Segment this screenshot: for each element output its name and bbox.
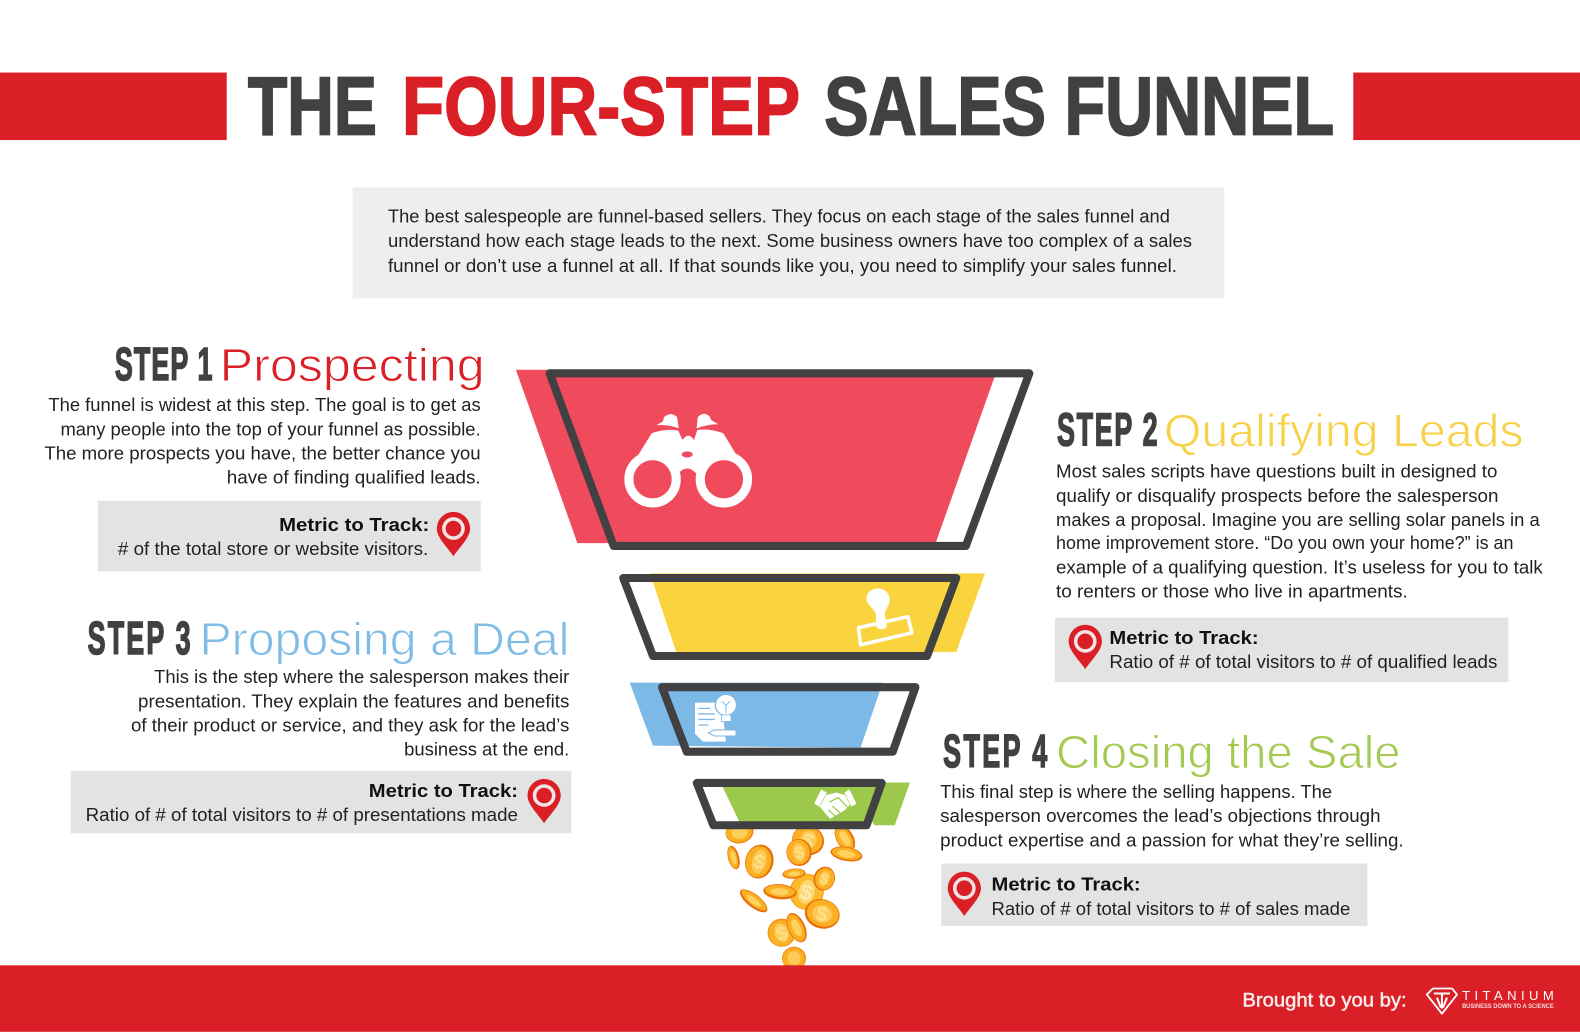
step 2 metric: Metric to Track:	[1109, 627, 1259, 648]
falling coins: $	[793, 842, 806, 863]
step 4 metric: Ratio of # of total visitors to # of sales made	[992, 899, 1350, 919]
step 3 panel	[71, 613, 571, 833]
intro text panel	[353, 187, 1224, 298]
step 3 panel: Proposing a Deal	[200, 613, 569, 665]
funnel tier 1: red	[516, 370, 1029, 546]
step 1 metric: Metric to Track:	[279, 514, 429, 535]
step 4 panel	[940, 726, 1404, 926]
icon: stamp	[859, 588, 912, 645]
step 1 panel: The funnel is widest at this step. The goal is to get as	[48, 395, 481, 415]
step 2 metric: Ratio of # of total visitors to # of qualified leads	[1109, 652, 1497, 672]
icon: binoculars	[624, 414, 750, 503]
icon: handshake	[814, 789, 857, 819]
step 1 panel: STEP 1	[115, 340, 212, 391]
step 3 metric: Ratio of # of total visitors to # of presentations made	[86, 805, 518, 825]
step 2 panel: example of a qualifying question. It’s useless for you to talk	[1056, 557, 1544, 577]
step 1 metric: # of the total store or website visitors.	[118, 539, 428, 559]
step 4 metric: Metric to Track:	[992, 874, 1141, 895]
logo: Titanium Business: TITANIUM	[1462, 988, 1554, 1003]
falling coins: $	[774, 922, 791, 946]
step 1 panel: The more prospects you have, the better chance you	[44, 443, 481, 463]
falling coins: $	[814, 903, 830, 927]
step 2 panel: STEP 2	[1057, 405, 1158, 456]
step 4 panel: salesperson overcomes the lead’s objections through	[940, 806, 1380, 826]
step 3 panel: STEP 3	[88, 614, 191, 665]
step 2 metric	[1055, 618, 1508, 682]
step 1 metric	[98, 501, 481, 571]
title: FOUR-STEP	[402, 60, 800, 153]
step 4 panel: STEP 4	[943, 726, 1047, 778]
step 3 panel: This is the step where the salesperson makes their	[154, 667, 569, 687]
step 3 panel: business at the end.	[404, 740, 569, 760]
falling coins: $	[799, 829, 817, 854]
step 3 metric: Metric to Track:	[369, 780, 518, 801]
step 2 panel: to renters or those who live in apartments.	[1056, 582, 1408, 602]
falling coins: $	[751, 850, 767, 875]
step 3 panel: of their product or service, and they ask for the lead’s	[131, 716, 569, 736]
step 1 panel: Prospecting	[220, 339, 485, 391]
intro text panel: understand how each stage leads to the next. Some business owners have too complex of a sales	[388, 231, 1192, 251]
falling coins	[724, 819, 864, 970]
falling coins: $	[797, 879, 816, 906]
logo: Titanium Business: BUSINESS DOWN TO A SCIENCE	[1462, 1004, 1554, 1010]
step 4 panel: product expertise and a passion for what they’re selling.	[940, 830, 1404, 850]
icon: document and lightbulb	[695, 694, 736, 742]
step 1 panel: have of finding qualified leads.	[227, 468, 481, 488]
step 4 panel: Closing the Sale	[1056, 726, 1401, 778]
step 2 panel: makes a proposal. Imagine you are selling solar panels in a	[1056, 510, 1541, 530]
intro text panel: funnel or don’t use a funnel at all. If that sounds like you, you need to simplify your sales funnel.	[388, 256, 1177, 276]
step 4 panel: This final step is where the selling happens. The	[940, 782, 1332, 802]
falling coins: $	[818, 870, 831, 888]
step 1 panel	[44, 339, 485, 571]
footer credit text: Brought to you by:	[1242, 990, 1407, 1012]
title: THE	[248, 60, 377, 153]
funnel tier 2: yellow	[623, 573, 985, 656]
step 2 panel: Most sales scripts have questions built in designed to	[1056, 462, 1497, 482]
step 1 panel: many people into the top of your funnel as possible.	[60, 419, 481, 439]
logo: Titanium Business	[1427, 988, 1554, 1014]
funnel tier 3: blue	[630, 683, 915, 752]
step 2 panel: qualify or disqualify prospects before the salesperson	[1056, 486, 1498, 506]
step 3 panel: presentation. They explain the features and benefits	[138, 691, 569, 711]
title	[248, 60, 1334, 153]
step 3 metric	[71, 771, 571, 833]
funnel tier 4: green	[697, 782, 910, 825]
title banner	[0, 60, 1580, 153]
step 2 panel: Qualifying Leads	[1164, 404, 1524, 456]
step 2 panel: home improvement store. “Do you own your home?” is an	[1056, 533, 1513, 553]
step 2 panel	[1055, 404, 1544, 682]
footer band	[0, 965, 1580, 1032]
step 4 metric	[941, 864, 1367, 926]
intro text panel: The best salespeople are funnel-based sellers. They focus on each stage of the sales funnel and	[388, 207, 1170, 227]
title: SALES FUNNEL	[824, 60, 1334, 153]
